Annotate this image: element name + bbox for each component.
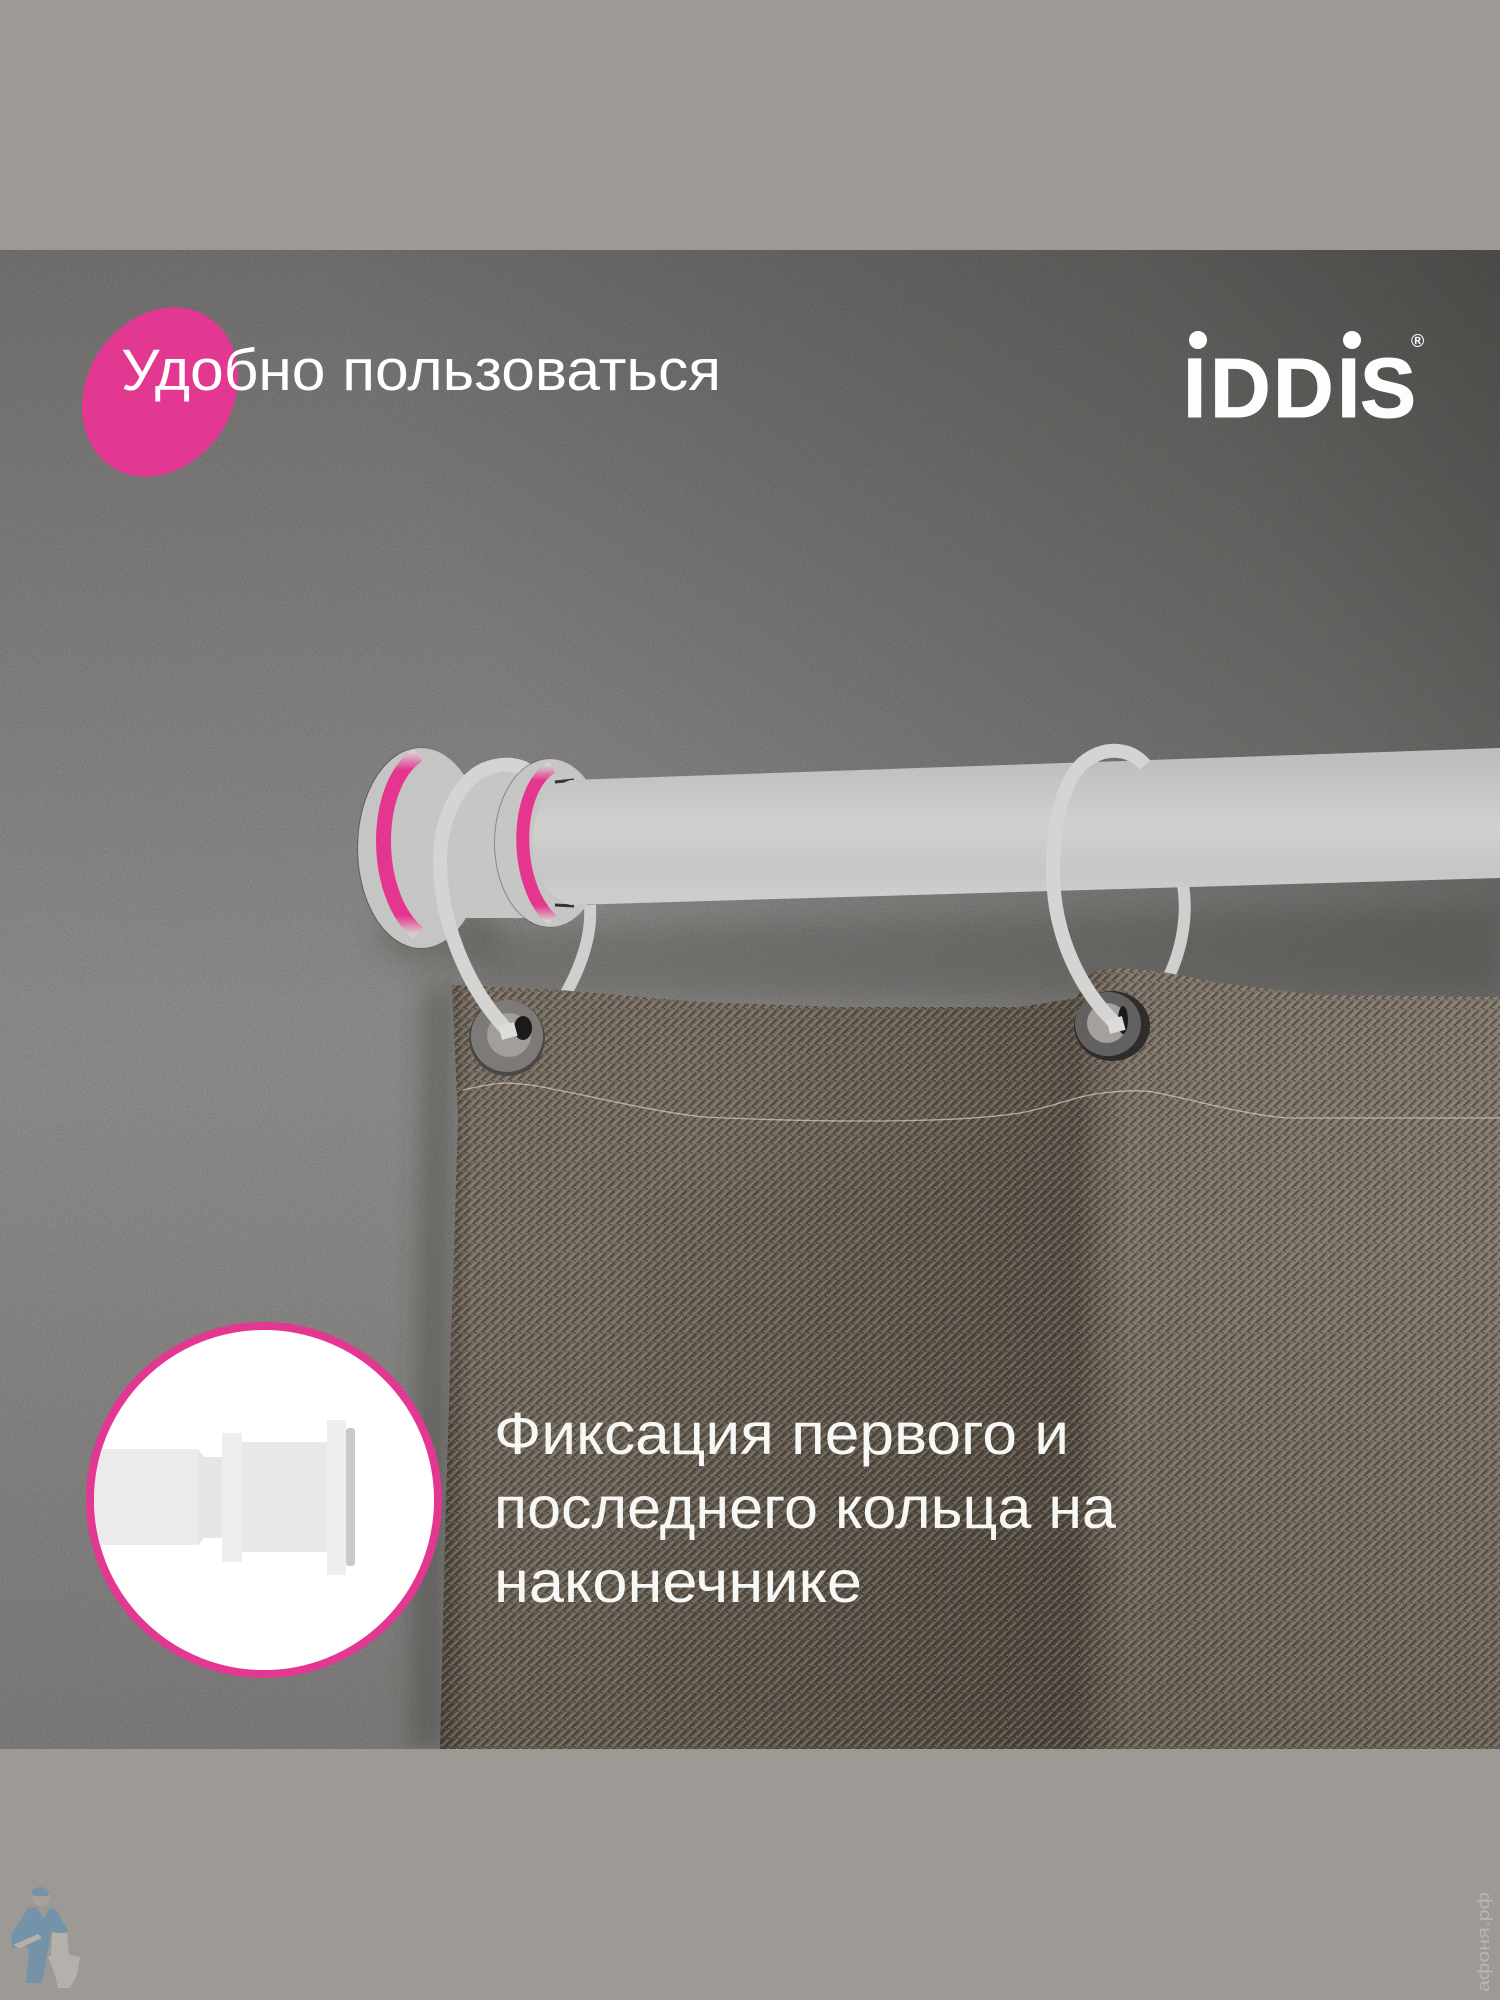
inset badge: rod end detail — [90, 1326, 438, 1674]
rod and curtain shadow on wall — [380, 905, 1500, 1749]
right eyelet — [1074, 991, 1150, 1061]
left eyelet — [469, 1000, 545, 1076]
curtain — [430, 960, 1500, 1750]
pink highlight arc — [384, 755, 418, 933]
watermark: site name: афоня.рф — [1474, 1892, 1493, 1992]
pink highlight arc — [523, 767, 552, 920]
front ring two — [1053, 751, 1145, 1025]
bottom band — [0, 1749, 1500, 2000]
logo — [1183, 331, 1424, 435]
curtain stitch line — [463, 1083, 1500, 1121]
rod gap shadow — [555, 780, 574, 906]
left flange — [357, 748, 466, 948]
logo dot right — [1343, 331, 1361, 349]
ring clip two — [1106, 1016, 1126, 1034]
rod — [532, 748, 1500, 905]
description text — [494, 1401, 1116, 1615]
description text: Фиксация первого и — [494, 1401, 1069, 1467]
description text: последнего кольца на — [494, 1475, 1116, 1541]
ring clip one — [498, 1022, 518, 1040]
photo panel — [0, 250, 1500, 1750]
wall — [0, 250, 1500, 1749]
ring backs — [565, 885, 1185, 995]
heading: Удобно пользоваться — [121, 338, 721, 403]
description text: наконечнике — [494, 1549, 862, 1615]
top band — [0, 0, 1500, 250]
logo wordmark: IDDIS — [1183, 341, 1416, 435]
second flange — [494, 758, 588, 928]
registered mark: ® — [1411, 331, 1424, 351]
front ring one — [440, 765, 535, 1030]
logo dot left — [1189, 331, 1207, 349]
badge ring — [90, 1326, 438, 1674]
pink blob — [50, 278, 270, 506]
watermark: plumber icon — [11, 1887, 80, 1988]
end cap body — [464, 772, 525, 918]
product drawing — [90, 1420, 355, 1575]
